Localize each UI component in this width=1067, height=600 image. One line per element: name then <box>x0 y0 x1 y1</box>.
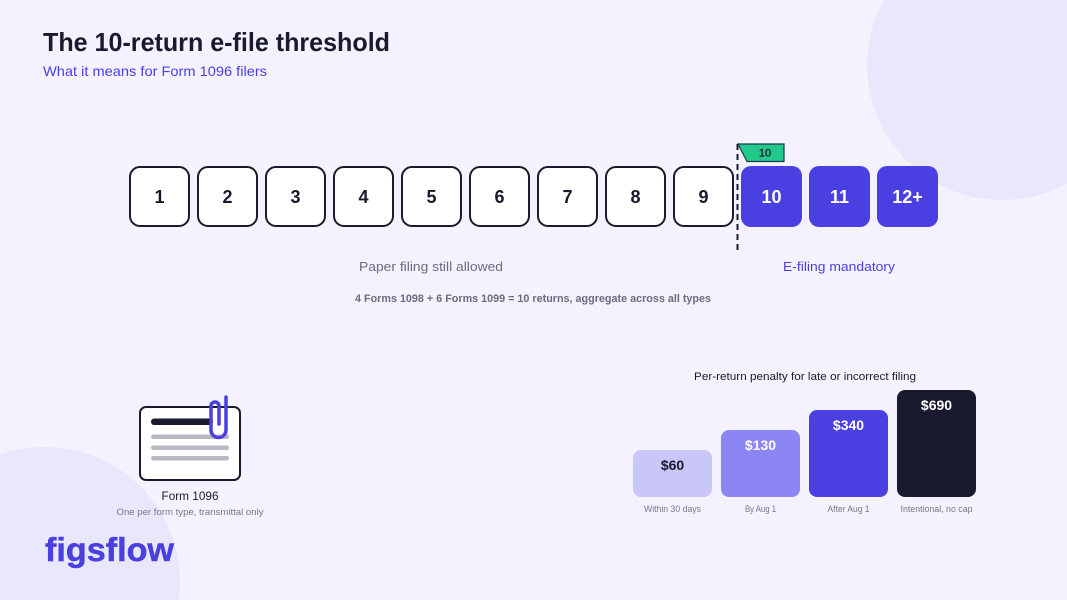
bar: intentional, no cap: $690 <box>921 397 952 413</box>
label: e-filing: E-filing mandatory <box>783 259 896 274</box>
subtitle: What it means for Form 1096 filers <box>43 63 267 79</box>
box numbers <box>154 187 923 207</box>
bar: after Aug 1: After Aug 1 <box>828 504 870 514</box>
bar chart: penalties <box>633 390 976 514</box>
bar: after Aug 1: $340 <box>833 417 864 433</box>
icon: form 1096 with paperclip <box>140 397 240 480</box>
box numbers: 9 <box>698 187 709 207</box>
box numbers: 8 <box>630 187 641 207</box>
bar: intentional, no cap <box>897 390 976 514</box>
bar: within 30 days <box>633 450 712 514</box>
logo: figsflow <box>45 531 174 568</box>
e-file return boxes 10 to 12+ <box>741 166 938 227</box>
box numbers: 3 <box>290 187 301 207</box>
box numbers: 10 <box>761 187 782 207</box>
box numbers: 11 <box>830 187 849 207</box>
box numbers: 6 <box>494 187 505 207</box>
bar: within 30 days: Within 30 days <box>644 504 701 514</box>
box numbers: 4 <box>358 187 369 207</box>
form caption: One per form type, transmittal only <box>116 507 264 517</box>
box numbers: 5 <box>426 187 437 207</box>
bar: by Aug 1 <box>721 430 800 514</box>
form label: Form 1096 <box>162 489 219 503</box>
box numbers: 12+ <box>892 187 923 207</box>
bar: within 30 days: $60 <box>661 457 684 473</box>
threshold dashed line <box>736 144 738 250</box>
bar: intentional, no cap: Intentional, no cap <box>900 504 972 514</box>
label: paper filing: Paper filing still allowed <box>359 259 503 274</box>
bar: by Aug 1: By Aug 1 <box>745 504 776 514</box>
aggregation note: 4 Forms 1098 + 6 Forms 1099 = 10 returns, aggregate across all types <box>355 293 711 305</box>
return count boxes <box>130 166 938 227</box>
threshold flag: 10 <box>759 148 771 160</box>
bar: after Aug 1 <box>809 410 888 514</box>
box numbers: 7 <box>562 187 573 207</box>
paper return boxes 1 to 9 <box>130 167 733 226</box>
box numbers: 1 <box>154 187 165 207</box>
box numbers: 2 <box>222 187 233 207</box>
bar: by Aug 1: $130 <box>745 437 776 453</box>
threshold flag <box>738 144 784 162</box>
title: The 10-return e-file threshold <box>43 27 390 57</box>
chart title: Per-return penalty for late or incorrect filing <box>694 371 916 383</box>
